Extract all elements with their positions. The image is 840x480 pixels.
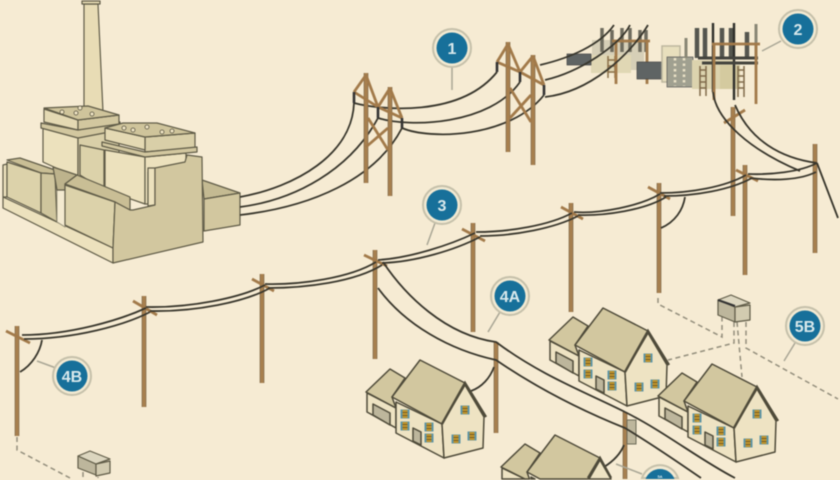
transformer box right: [718, 295, 750, 322]
callout 4B: 4B: [62, 369, 82, 386]
callout 3: [423, 186, 461, 245]
distribution poles: [6, 165, 758, 436]
callout 5A: 5A: [657, 474, 663, 479]
street poles: [496, 342, 636, 479]
callout 4B: [37, 357, 91, 395]
transmission tower 2: [497, 42, 544, 165]
house 3: [658, 364, 778, 462]
callout 5B: [784, 307, 824, 361]
callout 4A: [488, 277, 529, 332]
house 1: [366, 360, 486, 458]
feeder wires: [713, 92, 838, 218]
step-down yard right: [686, 23, 760, 104]
front tower: [80, 123, 197, 204]
transformer box left: [78, 451, 110, 476]
distribution wires: [20, 163, 817, 372]
step-up yard left: [567, 28, 664, 84]
callout 4A: 4A: [500, 289, 521, 306]
callout 5A: [616, 464, 678, 479]
annex building: [202, 180, 240, 231]
wires into substation: [540, 25, 648, 97]
chimney: [82, 1, 103, 112]
switchgear panels: [662, 46, 740, 89]
callout 1: [433, 29, 471, 90]
transmission wires from plant to substation: [240, 103, 402, 215]
callout 2: 2: [794, 22, 803, 39]
house 4: [501, 435, 611, 479]
wires between towers: [354, 72, 544, 134]
transmission tower 1: [354, 73, 402, 196]
feeder poles from substation: [724, 107, 815, 253]
callout 5B: 5B: [795, 319, 815, 336]
rear tower: [41, 106, 120, 180]
service drop dashed lines: [17, 298, 838, 478]
front base and blocks: [3, 155, 203, 263]
callout 1: 1: [448, 41, 457, 58]
power plant: [3, 1, 240, 263]
street wires: [378, 262, 735, 478]
callout 3: 3: [438, 198, 447, 215]
house 2: [549, 308, 669, 406]
callout 2: [762, 10, 817, 51]
substation: [567, 23, 760, 104]
